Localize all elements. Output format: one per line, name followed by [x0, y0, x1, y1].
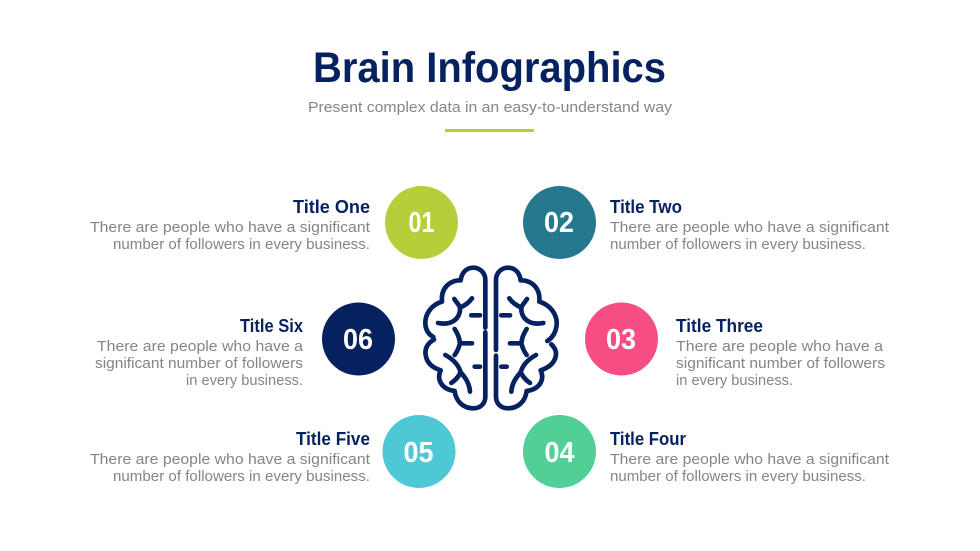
badge 01 [385, 186, 458, 259]
text: description one: number of followers in every business. [113, 236, 370, 253]
badge 04: 04 [544, 437, 574, 469]
text: description five [90, 451, 371, 485]
text: description four: There are people who have a significant [610, 451, 890, 468]
badge 03 [585, 302, 658, 376]
text: description four [610, 451, 890, 485]
text: description one: There are people who have a significant [90, 219, 371, 236]
badge 06: 06 [343, 324, 373, 356]
panel: item 01 [90, 186, 458, 259]
text: description six: in every business. [186, 372, 303, 389]
badge 01: 01 [408, 207, 434, 239]
heading: Title Three: Title Three [676, 316, 763, 336]
text: description six: There are people who have a [97, 338, 304, 355]
title: Brain Infographics [313, 44, 666, 92]
text: description six: significant number of followers [95, 355, 303, 372]
subtitle: Present complex data in an easy-to-understand way [308, 99, 673, 116]
badge 06 [322, 302, 395, 376]
badge 05: 05 [404, 437, 434, 469]
text: description five: number of followers in every business. [113, 468, 370, 485]
text: description two: number of followers in every business. [610, 236, 866, 253]
panel: item 04 [523, 415, 890, 488]
text: description one [90, 219, 371, 253]
icon: brain [425, 268, 557, 408]
text: description four: number of followers in every business. [610, 468, 866, 485]
panel: item 06 [95, 302, 395, 389]
heading: Title One: Title One [293, 197, 370, 217]
text: description three: There are people who have a [676, 338, 884, 355]
panel: item 03 [585, 302, 885, 389]
heading: Title Four: Title Four [610, 429, 686, 449]
heading: Title Five: Title Five [296, 429, 370, 449]
panel: item 05 [90, 415, 456, 488]
badge 03: 03 [606, 324, 636, 356]
badge 02 [523, 186, 596, 259]
text: description two: There are people who have a significant [610, 219, 890, 236]
text: description two [610, 219, 890, 253]
text: description five: There are people who have a significant [90, 451, 371, 468]
heading: Title Six: Title Six [240, 316, 303, 336]
panel: item 02 [523, 186, 890, 259]
text: description three: significant number of followers [676, 355, 885, 372]
heading: Title Two: Title Two [610, 197, 682, 217]
badge 05 [382, 415, 456, 488]
text: description three: in every business. [676, 372, 793, 389]
text: description three [676, 338, 885, 389]
title underline [445, 129, 534, 132]
text: description six [95, 338, 304, 389]
badge 02: 02 [544, 207, 574, 239]
badge 04 [523, 415, 596, 488]
